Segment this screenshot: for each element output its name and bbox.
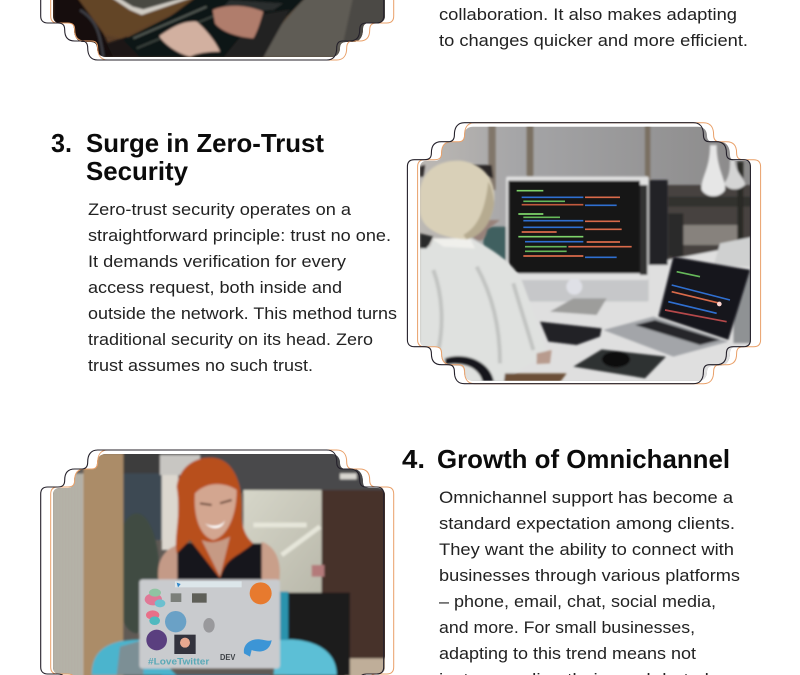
text block: section 4 body: [438, 488, 740, 675]
laptop stickers: DEV: [220, 653, 236, 662]
orange outline: [51, 450, 394, 675]
heading: 4. Growth of Omnichannel: 4.: [402, 444, 425, 474]
text block: section 3 body: It demands verification for every: [88, 252, 347, 271]
text block: section 3 body: Zero-trust security operates on a: [88, 200, 352, 219]
text block: section 4 body: and more. For small businesses,: [439, 618, 695, 637]
text block: section 3 body: straightforward principle: trust no one.: [88, 226, 391, 245]
text block: section 4 body: standard expectation among clients.: [439, 514, 735, 533]
text block: section 3 body: traditional security on its head. Zero: [88, 330, 373, 349]
heading: 3. Surge in Zero-Trust Security: Security: [86, 156, 189, 186]
text block: section 3 body: [88, 200, 397, 375]
text block: end of section 2: collaboration. It also makes adapting: [439, 5, 737, 24]
text block: section 4 body: Omnichannel support has become a: [439, 488, 734, 507]
orange outline: [418, 123, 761, 384]
text block: section 4 body: businesses through various platforms: [439, 566, 740, 585]
code lines on monitor: [517, 191, 632, 257]
text block: section 4 body: adapting to this trend means not: [439, 644, 696, 663]
photo frame 4: woman with sticker-covered laptop: [41, 450, 394, 675]
laptop stickers: #LoveTwitter: [148, 656, 210, 666]
photo frame 1: person typing on keyboard: [41, 0, 394, 60]
heading: 4. Growth of Omnichannel: Growth of Omnichannel: [437, 444, 730, 474]
text block: end of section 2: [439, 5, 748, 50]
text block: section 4 body: – phone, email, chat, social media,: [439, 592, 716, 611]
dark outline: [407, 123, 750, 384]
photo: woman at monitor and laptop: [417, 123, 753, 387]
dark outline: [41, 0, 384, 60]
text block: section 3 body: outside the network. This method turns: [88, 304, 397, 323]
dark outline: [41, 450, 384, 675]
photo: red-haired woman on teal armchair: [50, 450, 390, 675]
orange outline: [51, 0, 394, 60]
text block: end of section 2: to changes quicker and more efficient.: [439, 31, 748, 50]
heading: 3. Surge in Zero-Trust Security: 3.: [51, 128, 72, 158]
heading: 3. Surge in Zero-Trust Security: Surge in Zero-Trust: [86, 128, 324, 158]
text block: section 3 body: access request, both inside and: [88, 278, 342, 297]
code lines on laptop: [665, 272, 730, 322]
photo: hands on keyboard: [50, 0, 387, 60]
heading: 3. Surge in Zero-Trust Security: [51, 128, 324, 186]
text block: section 4 body: They want the ability to connect with: [439, 540, 734, 559]
laptop stickers: [145, 581, 272, 666]
text block: section 3 body: trust assumes no such trust.: [88, 356, 313, 375]
photo frame 3: developer at computer with code: [407, 123, 761, 387]
